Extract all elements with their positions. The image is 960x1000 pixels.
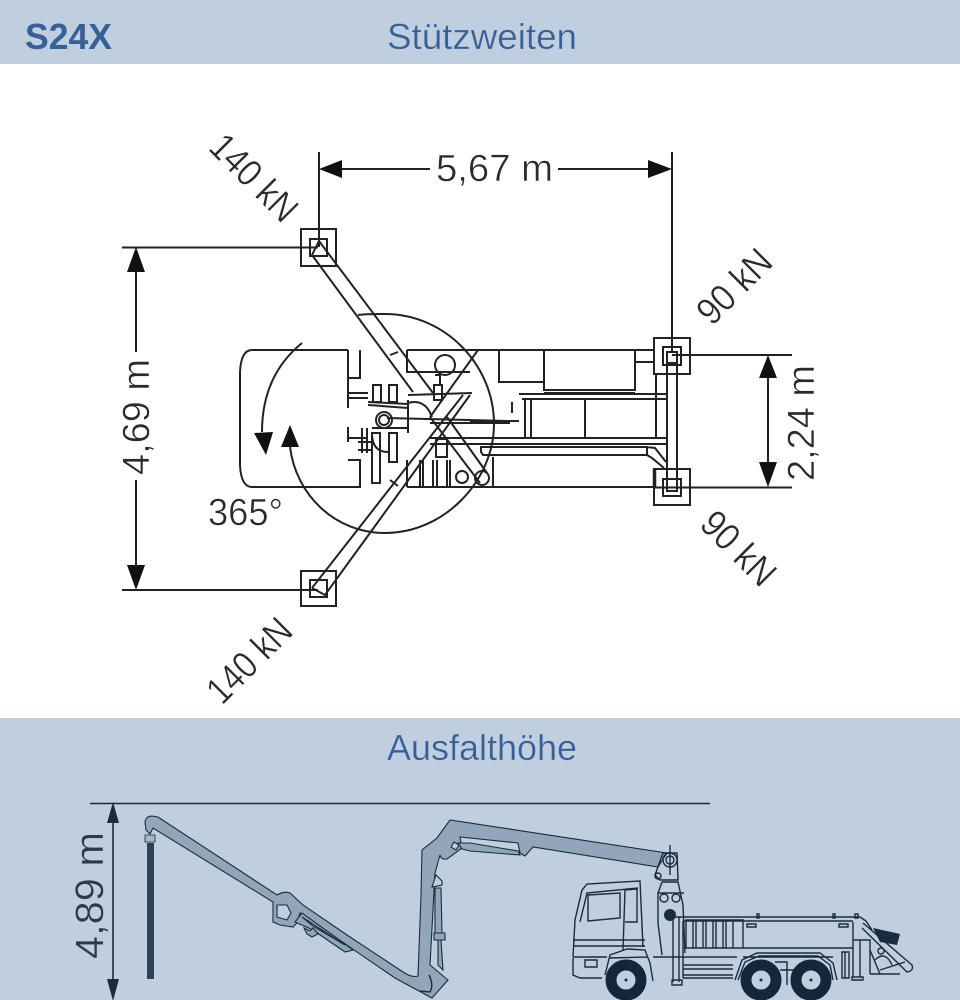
rear outrigger beam <box>667 352 677 491</box>
front outrigger arm bottom <box>312 350 478 595</box>
dimension: width 5,67 m <box>319 148 672 352</box>
truck side view <box>573 845 912 995</box>
wheel rear <box>796 965 826 995</box>
rotation arcs <box>254 314 494 533</box>
tank and chassis <box>653 914 872 985</box>
truck cab plan <box>240 350 368 487</box>
truck chassis plan <box>358 350 667 487</box>
front outrigger arm top <box>312 241 487 483</box>
folded boom <box>145 816 667 998</box>
support pads <box>301 229 690 606</box>
load labels: 90 kN <box>689 241 781 333</box>
label 365 degrees: 365° <box>208 492 283 534</box>
header band <box>0 0 960 64</box>
cab <box>573 881 653 981</box>
heading: Stützweiten: Stützweiten <box>387 16 577 57</box>
dimension: height 4,89 m: 4,89 m <box>68 832 112 959</box>
rear chute and hopper <box>860 923 912 974</box>
model name: S24X <box>25 16 112 57</box>
heading: Ausfalthöhe: Ausfalthöhe <box>387 727 577 768</box>
load labels: 140 kN <box>199 610 301 712</box>
wheel middle <box>746 965 776 995</box>
dimension: length 4,69 m <box>116 247 318 590</box>
dimension: length 4,69 m: 4,69 m <box>116 359 158 475</box>
load labels: 90 kN <box>692 503 784 595</box>
outrigger plan diagram <box>116 126 823 712</box>
wheel front <box>611 965 641 995</box>
load labels: 140 kN <box>201 126 306 231</box>
dimension: 2,24 m: 2,24 m <box>781 365 823 481</box>
end hose <box>145 835 155 979</box>
panel: Ausfalthöhe <box>0 718 960 1000</box>
dimension: height 4,89 m <box>68 802 710 1000</box>
dimension: width 5,67 m: 5,67 m <box>436 148 553 190</box>
mast <box>655 845 685 955</box>
dimension: 2,24 m <box>654 355 823 488</box>
load labels <box>199 126 784 712</box>
